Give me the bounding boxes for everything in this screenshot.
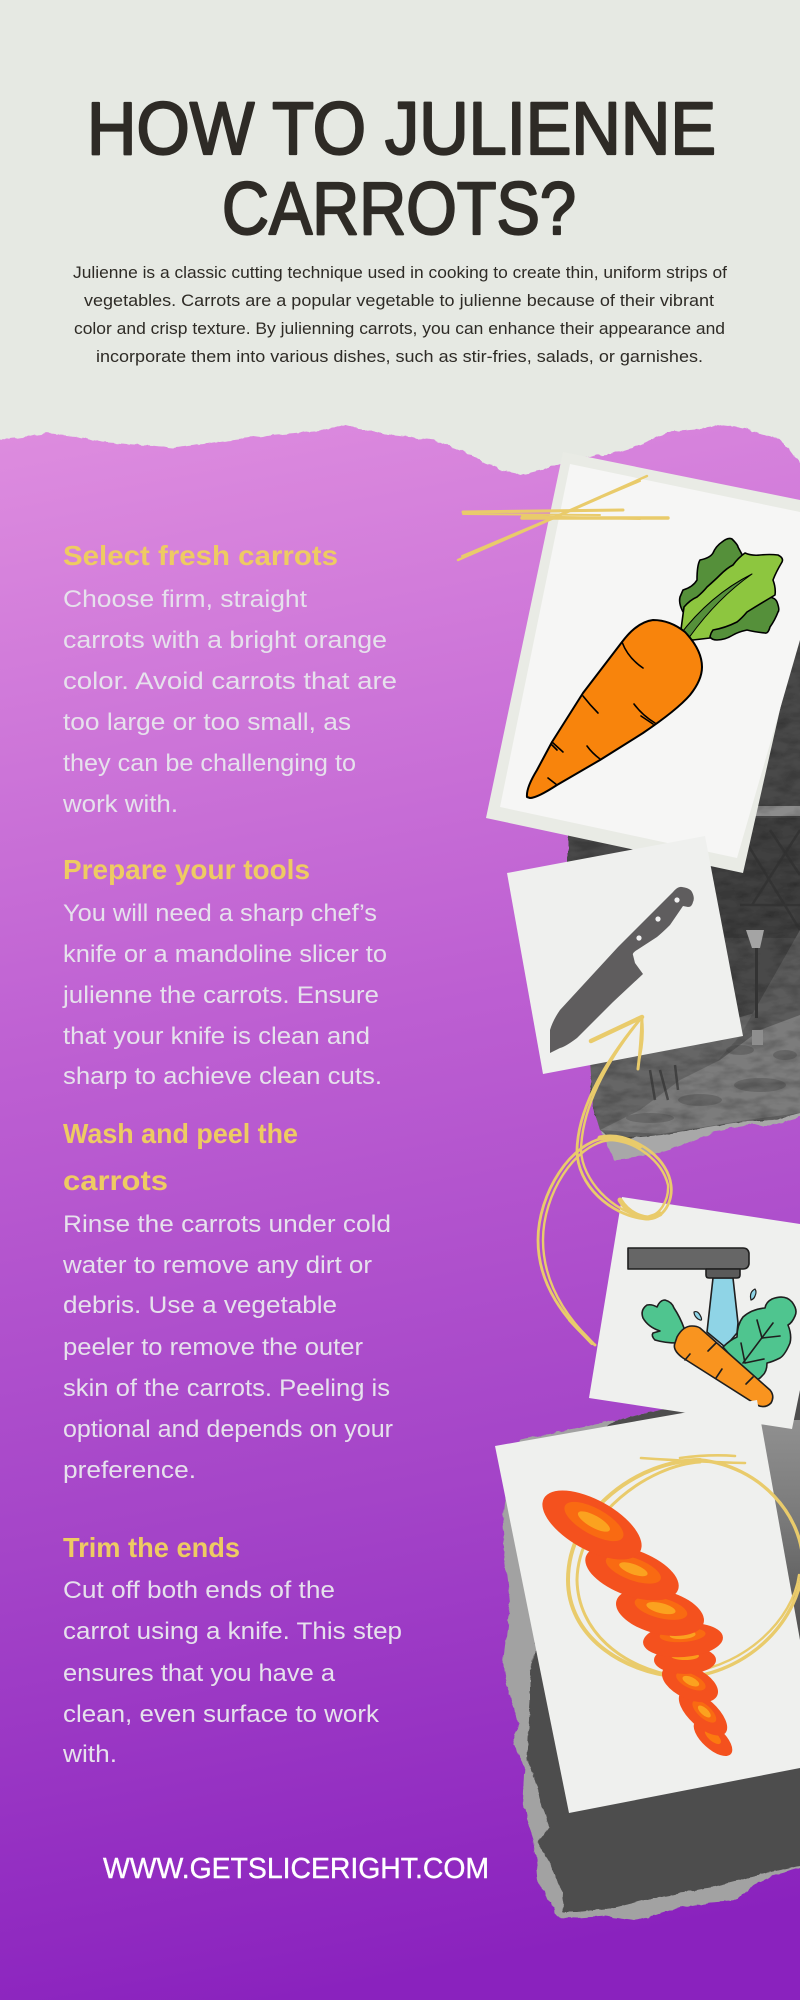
arrow: yellow looping arrow to knife [538,1017,671,1345]
step 3: wash and peel the carrots [62,1118,393,1484]
body text: color. Avoid carrots that are [63,668,397,695]
photo: torn bridge photograph [568,600,800,1160]
body text: knife or a mandoline slicer to [63,941,387,968]
panel: torn paper header [0,0,800,490]
icon: carrot [527,538,782,798]
intro paragraph: vegetables. Carrots are a popular vegetable to julienne because of their vibrant [84,291,714,310]
heading: Prepare your tools [63,854,310,885]
body text [62,586,397,818]
step 1: select fresh carrots [62,540,397,818]
body text: carrot using a knife. This step [63,1618,402,1645]
body text [62,1577,402,1768]
body text: sharp to achieve clean cuts. [63,1063,382,1090]
body text: peeler to remove the outer [63,1334,363,1361]
body text: work with. [62,791,178,818]
heading: Select fresh carrots [63,540,338,571]
illustration: carrot slices [532,1476,738,1762]
heading [63,1118,298,1196]
body text: You will need a sharp chef’s [63,900,377,927]
body text: preference. [63,1457,196,1484]
body text: they can be challenging to [63,750,356,777]
body text [62,1211,393,1484]
body text: water to remove any dirt or [62,1252,372,1279]
body text: julienne the carrots. Ensure [62,982,379,1009]
title [87,87,716,250]
title: HOW TO JULIENNE [87,87,716,170]
body text: Cut off both ends of the [63,1577,335,1604]
intro paragraph [73,263,727,366]
icon: faucet and washed carrot [628,1248,796,1407]
body text: with. [62,1741,117,1768]
icon: chef's knife [550,887,694,1053]
website footer: WWW.GETSLICERIGHT.COM [103,1853,489,1885]
body text: debris. Use a vegetable [63,1292,337,1319]
panel: carrot card [486,452,800,873]
photo: torn bottom photograph [502,1380,800,1920]
heading: Trim the ends [63,1532,240,1563]
step 2: prepare your tools [62,854,387,1090]
intro paragraph: color and crisp texture. By julienning carrots, you can enhance their appearance and [74,319,725,338]
title: CARROTS? [222,167,576,250]
scribble: yellow star lines [458,476,668,560]
scribble: yellow circle [568,1455,800,1677]
intro paragraph: Julienne is a classic cutting technique used in cooking to create thin, uniform strips of [73,263,727,282]
body text [62,900,387,1090]
body text: ensures that you have a [63,1660,336,1687]
intro paragraph: incorporate them into various dishes, such as stir-fries, salads, or garnishes. [96,347,703,366]
body text: that your knife is clean and [63,1023,370,1050]
body text: optional and depends on your [63,1416,393,1443]
body text: too large or too small, as [63,709,351,736]
panel: sliced carrot card [495,1400,800,1813]
body text: carrots with a bright orange [63,627,387,654]
panel: knife card [507,836,743,1074]
step 4: trim the ends [62,1532,402,1768]
heading: carrots [63,1165,168,1196]
body text: Rinse the carrots under cold [63,1211,391,1238]
heading: Wash and peel the [63,1118,298,1149]
body text: skin of the carrots. Peeling is [63,1375,390,1402]
body text: clean, even surface to work [63,1701,380,1728]
body text: Choose firm, straight [63,586,307,613]
panel: washing card [589,1197,800,1429]
